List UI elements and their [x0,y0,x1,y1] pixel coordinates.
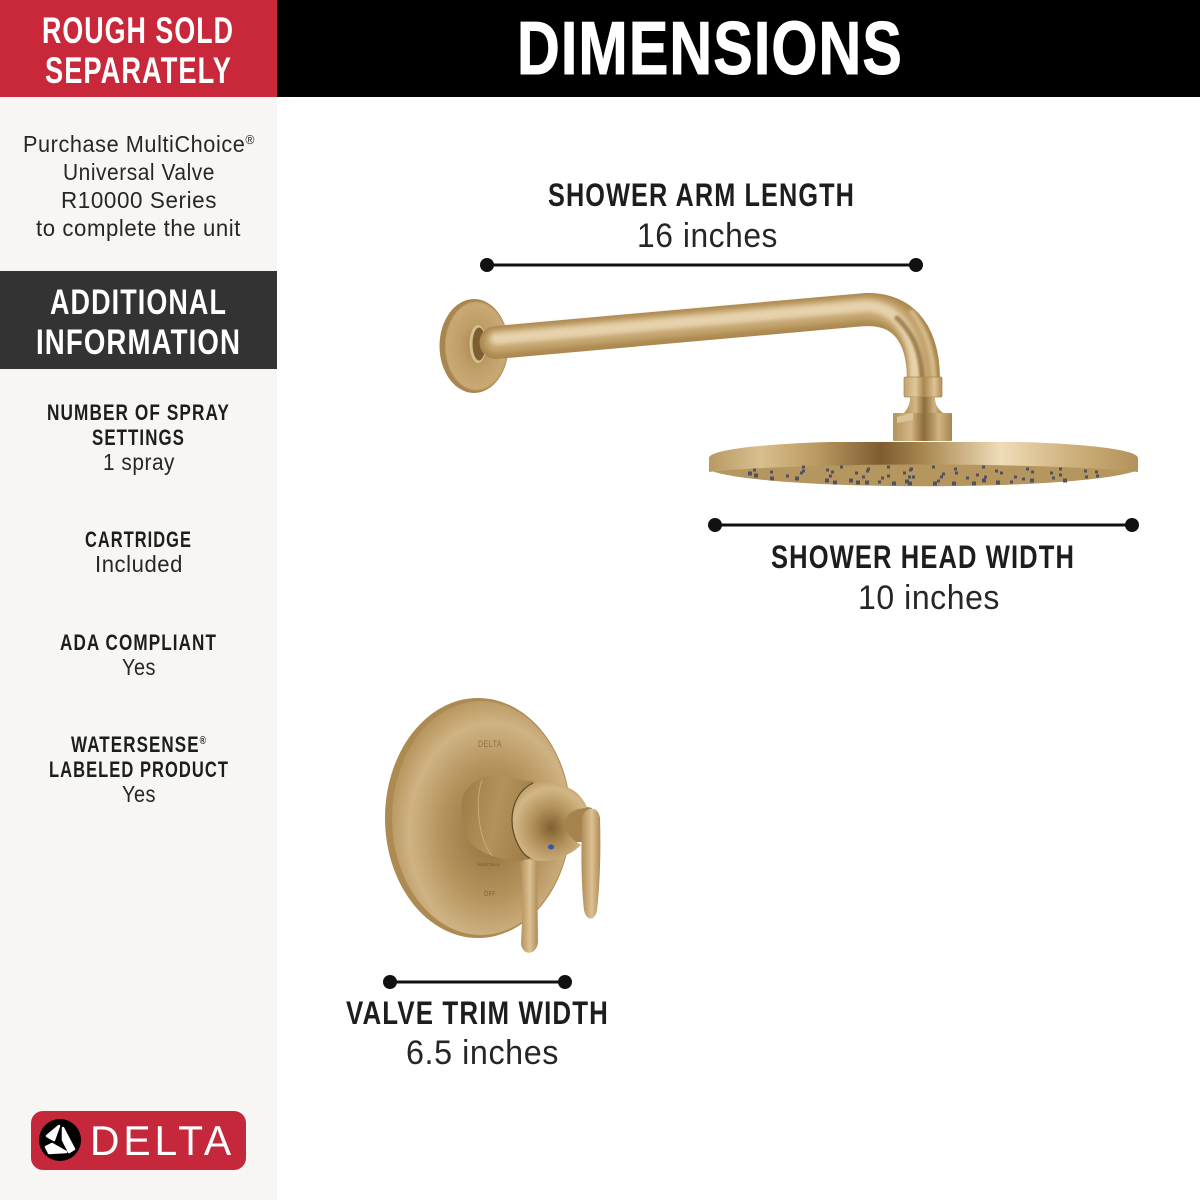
red banner: rough sold separately: SEPARATELY [45,50,232,91]
label: valve trim width: 6.5 inches [406,1034,559,1072]
text block: purchase note: Purchase MultiChoice [23,131,259,157]
text block: purchase note: ® [245,132,255,147]
label: valve trim width: VALVE TRIM WIDTH [346,995,609,1031]
logo: delta: DELTA [90,1117,235,1164]
dimension line: valve trim width [383,975,572,989]
engraved small mark: MultiChoice [478,862,500,867]
heading: additional information: INFORMATION [36,323,241,362]
text block: purchase note: to complete the unit [36,215,241,241]
front lever [520,859,538,953]
title: dimensions: DIMENSIONS [517,6,903,90]
spec: ada compliant [60,630,217,680]
label: shower arm length [548,177,855,255]
label: shower arm length: 16 inches [637,217,778,255]
engraved off mark: OFF [484,889,496,898]
spec: ada compliant: ADA COMPLIANT [60,630,217,655]
red banner: rough sold separately: ROUGH SOLD [42,10,234,51]
spec: cartridge [85,527,192,577]
blue indicator [548,844,554,850]
shower arm flange [440,299,508,393]
spec: number of spray settings: SETTINGS [92,425,185,450]
label: shower head width [771,539,1075,617]
label: shower head width: 10 inches [858,579,1000,617]
spec: number of spray settings: NUMBER OF SPRAY [47,400,230,425]
valve trim illustration [385,698,600,953]
label: valve trim width [346,995,609,1072]
spec: number of spray settings [47,400,230,475]
shower head body [709,442,1138,486]
valve lever neck [560,805,592,842]
heading: additional information: ADDITIONAL [50,283,227,322]
logo: delta [31,1111,246,1170]
swivel collar [904,377,942,397]
spec: watersense labeled product [49,732,229,807]
dimension line: shower arm length [480,258,923,272]
spec: cartridge: CARTRIDGE [85,527,192,552]
shower arm tube [496,306,934,378]
text block: purchase note [23,131,255,241]
red banner: rough sold separately [0,0,277,97]
spec: number of spray settings: 1 spray [103,449,175,475]
spec: watersense labeled product: Yes [122,781,156,807]
shower arm and head illustration [440,299,1138,486]
label: shower arm length: SHOWER ARM LENGTH [548,177,855,213]
label: shower head width: SHOWER HEAD WIDTH [771,539,1075,575]
shower head nozzles [748,466,1099,486]
spec: watersense labeled product: ® [200,735,207,747]
rear lever [581,809,600,919]
valve back plate [385,698,571,938]
spec: watersense labeled product: WATERSENSE [71,732,237,757]
spec: watersense labeled product: LABELED PRODUCT [49,757,229,782]
swivel neck [904,397,943,413]
spec: cartridge: Included [95,551,183,577]
spec: ada compliant: Yes [122,654,156,680]
left sidebar panel [0,97,277,1200]
text block: purchase note: R10000 Series [61,187,217,213]
text block: purchase note: Universal Valve [63,159,215,185]
valve knob [512,782,587,861]
header band: dimensions [277,0,1200,97]
dimension line: shower head width [708,518,1139,532]
valve cylinder [461,776,535,861]
head nut [893,413,952,441]
heading: additional information [0,271,277,369]
engraved delta mark: DELTA [478,739,502,750]
